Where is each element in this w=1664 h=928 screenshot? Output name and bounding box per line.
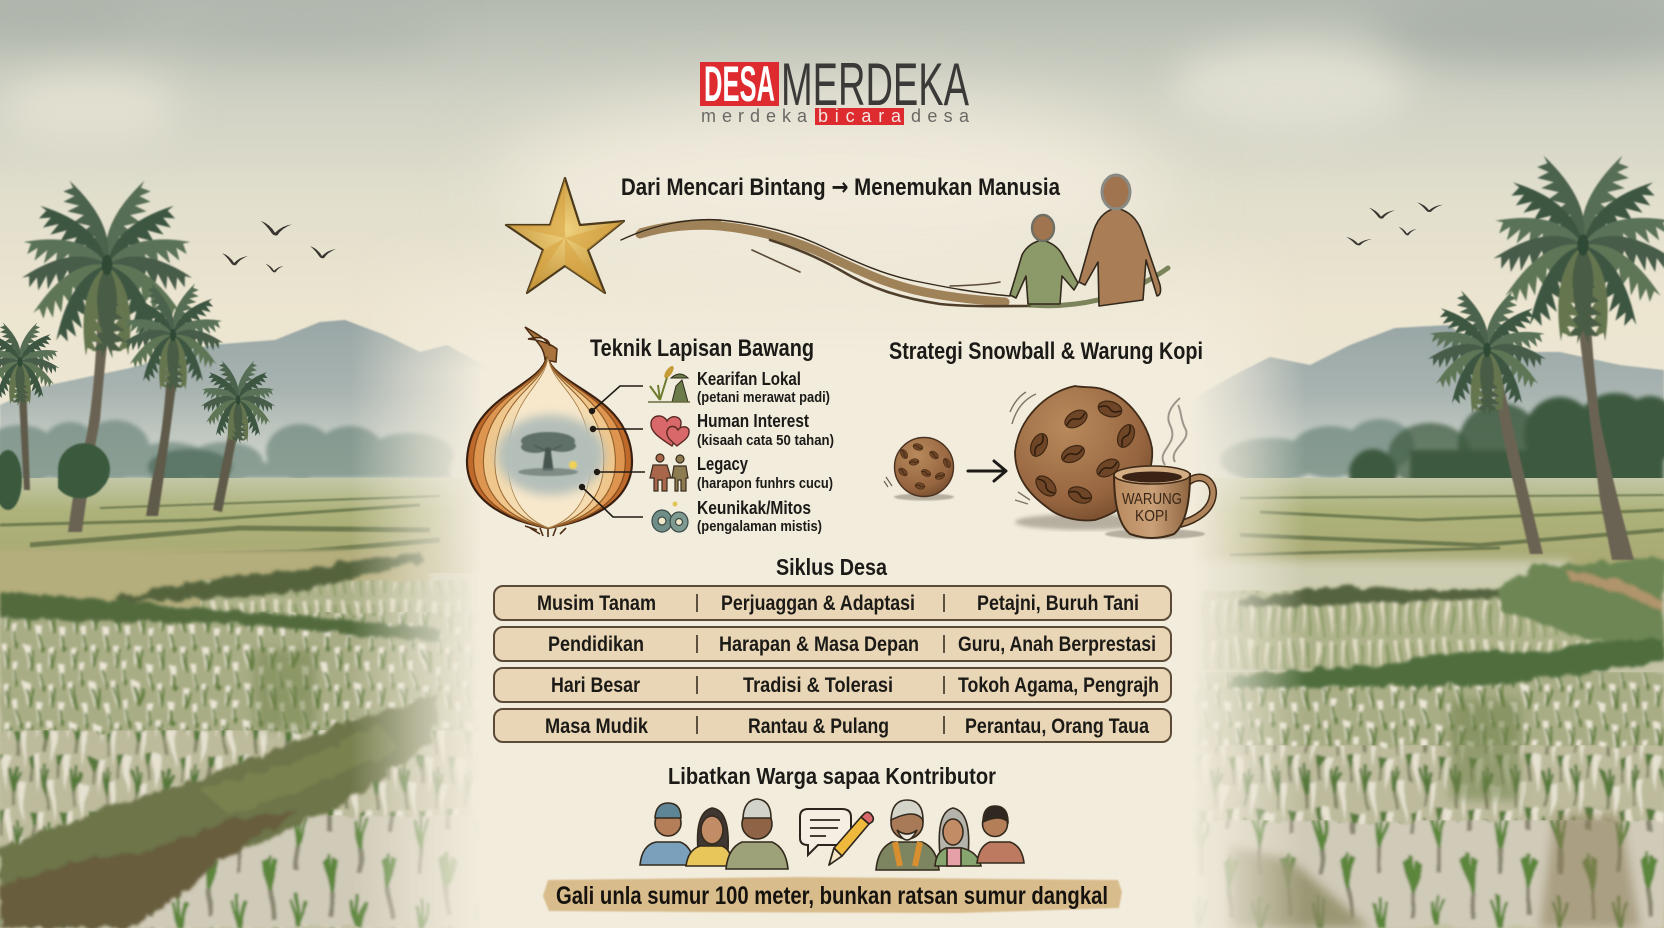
row: Masa Mudik: Perantau, Orang Taua — [965, 715, 1149, 738]
center paper fade — [356, 305, 1300, 928]
icon: mystical stones — [652, 502, 688, 532]
onion diagram — [467, 327, 632, 537]
icon: big coffee snowball — [1010, 386, 1155, 530]
onion stem — [525, 327, 557, 362]
row: Hari Besar — [494, 668, 1171, 702]
row: Masa Mudik: Rantau & Pulang — [748, 715, 889, 738]
item text: Kearifan Lokal: (petani merawat padi) — [697, 389, 830, 406]
icon: Warung Kopi cup — [1105, 398, 1213, 539]
icon: parent and child figures — [1010, 175, 1161, 306]
logo: Desa Merdeka: merdeka — [701, 106, 808, 126]
row: Musim Tanam — [494, 586, 1171, 620]
field bunds — [0, 552, 1664, 928]
palm trees — [0, 150, 1664, 560]
misty tree — [518, 432, 578, 476]
row: Pendidikan: Pendidikan — [548, 633, 644, 656]
heading: village cycle: Siklus Desa — [776, 554, 887, 580]
item text: Kearifan Lokal: Kearifan Lokal — [697, 369, 801, 389]
icon: small coffee snowball — [884, 438, 954, 500]
child head — [1032, 215, 1054, 241]
heading: from star to human: Dari Mencari Bintang → Menemukan Manusia — [621, 173, 1061, 201]
heading: snowball strategy: Strategi Snowball & Warung Kopi — [889, 338, 1203, 365]
icon: Warung Kopi cup: KOPI — [1135, 508, 1168, 525]
item text: Legacy: (harapon funhrs cucu) — [697, 475, 833, 492]
villager: elder with cap — [726, 799, 788, 869]
logo: Desa Merdeka — [700, 51, 970, 126]
trees right — [1220, 419, 1414, 482]
icon: speech bubble — [800, 809, 851, 855]
villagers left group — [640, 799, 788, 869]
villager: woman yellow — [686, 808, 732, 866]
onion roots — [525, 526, 566, 537]
icon: Warung Kopi cup: WARUNG — [1122, 491, 1182, 508]
item text: Legacy: Legacy — [697, 454, 748, 474]
icon: two generations — [650, 454, 688, 491]
banner: closing quote — [543, 877, 1122, 913]
item text: Keunikak/Mitos — [697, 498, 822, 535]
logo: Desa Merdeka: DESA — [704, 56, 775, 112]
adult figure — [1079, 208, 1161, 306]
row: Musim Tanam: Perjuaggan & Adaptasi — [721, 592, 915, 615]
row: Hari Besar: Tradisi & Tolerasi — [743, 674, 893, 697]
heading: involve residents: Libatkan Warga sapaa Kontributor — [668, 763, 996, 789]
banner: closing quote: Gali unla sumur 100 meter, bunkan ratsan sumur dangkal — [556, 882, 1108, 910]
path: ribbon from star to people — [621, 220, 1168, 306]
logo: Desa Merdeka: MERDEKA — [781, 51, 969, 118]
row: Pendidikan — [494, 627, 1171, 661]
child figure — [1010, 240, 1078, 304]
villagers right group — [876, 800, 1024, 870]
villager: young man — [977, 806, 1024, 863]
row: Musim Tanam: Petajni, Buruh Tani — [977, 592, 1139, 615]
near field — [0, 478, 1664, 573]
item text: Human Interest: Human Interest — [697, 411, 809, 431]
icon: gold star — [506, 178, 624, 293]
item text: Keunikak/Mitos: (pengalaman mistis) — [697, 518, 822, 535]
heading: onion technique: Teknik Lapisan Bawang — [590, 335, 814, 362]
onion layers — [467, 357, 632, 528]
row: Masa Mudik — [494, 709, 1171, 742]
row: Musim Tanam: Musim Tanam — [537, 592, 656, 615]
birds — [222, 202, 1443, 272]
row: Hari Besar: Tokoh Agama, Pengrajh — [958, 674, 1159, 697]
villager: gray-haired woman — [935, 808, 981, 866]
icon: pencil — [829, 812, 873, 865]
villager: old man — [876, 800, 939, 870]
arrow — [968, 461, 1006, 481]
icon: hearts — [651, 416, 689, 446]
row: Pendidikan: Harapan & Masa Depan — [719, 633, 919, 656]
adult head — [1102, 175, 1130, 209]
item text: Human Interest — [697, 411, 834, 449]
item text: Keunikak/Mitos: Keunikak/Mitos — [697, 498, 811, 518]
item text: Human Interest: (kisaah cata 50 tahan) — [697, 432, 834, 449]
row: Masa Mudik: Masa Mudik — [545, 715, 648, 738]
table: village cycle — [494, 586, 1171, 742]
row: Pendidikan: Guru, Anah Berprestasi — [958, 633, 1156, 656]
item text: Legacy — [697, 454, 833, 492]
hazy tree line left — [0, 420, 454, 485]
icon: rice and farmer — [648, 365, 690, 402]
onion callout lines — [580, 386, 645, 517]
villager: cap — [640, 803, 694, 865]
row: Hari Besar: Hari Besar — [551, 674, 640, 697]
logo: Desa Merdeka: desa — [911, 106, 970, 126]
logo: Desa Merdeka: bicara — [818, 106, 902, 126]
item text: Kearifan Lokal — [697, 369, 830, 406]
